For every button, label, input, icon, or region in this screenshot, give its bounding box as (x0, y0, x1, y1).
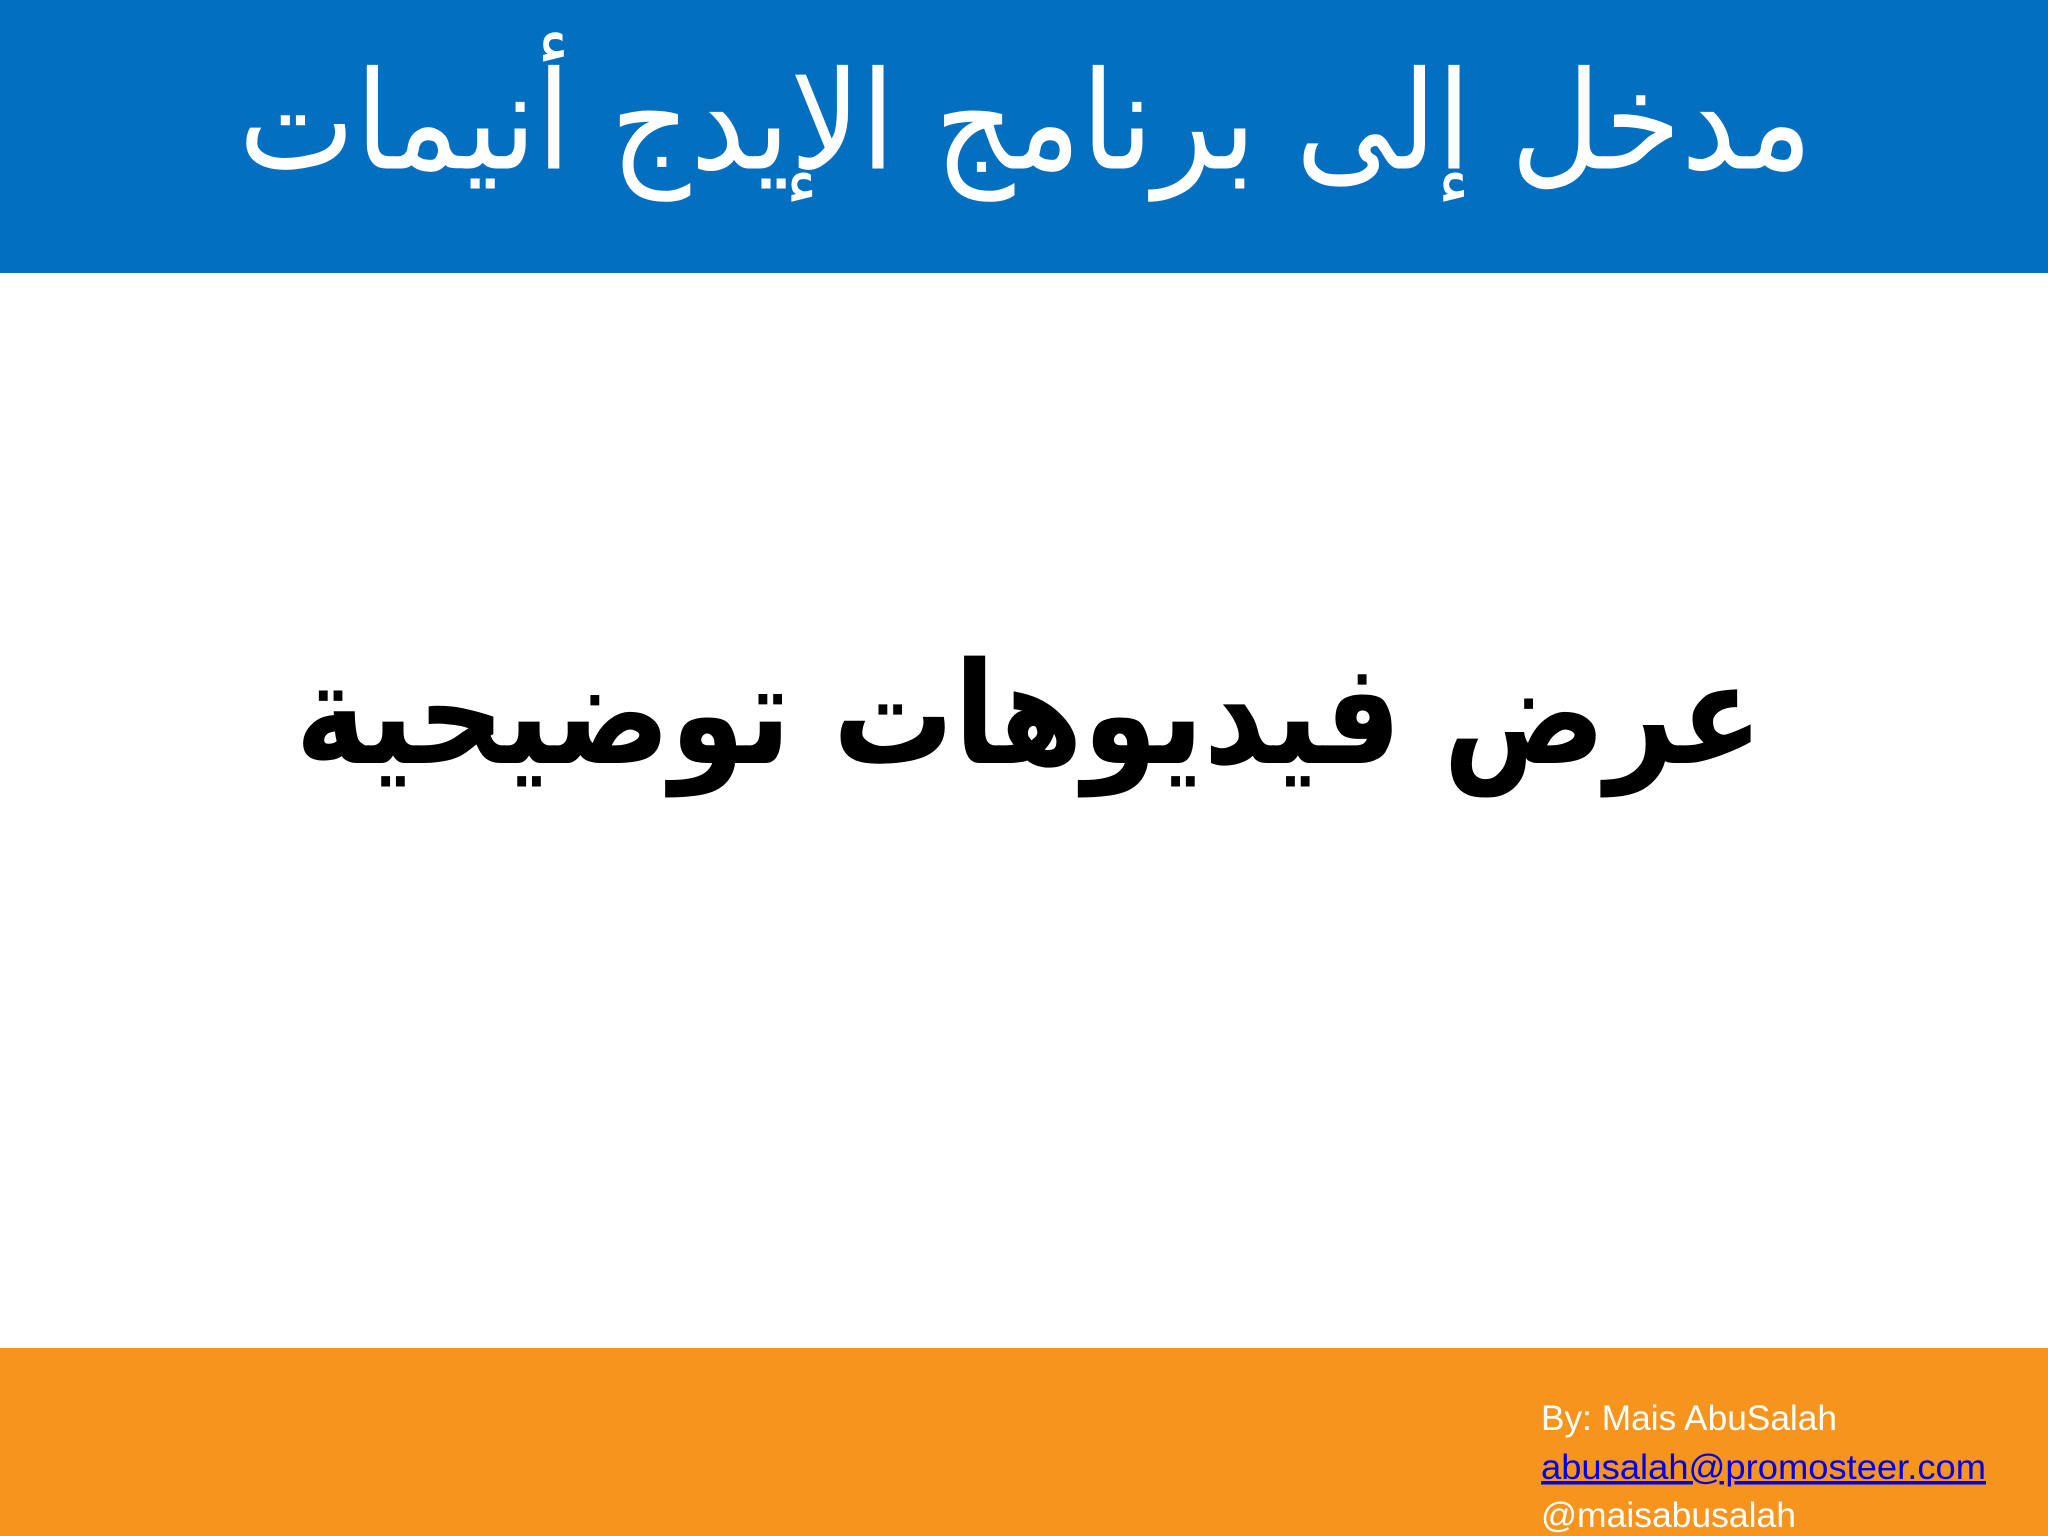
author name: By: Mais AbuSalah (1541, 1399, 1837, 1438)
social handle: @maisabusalah (1541, 1496, 1796, 1535)
author credits (1541, 1399, 1986, 1535)
main heading: عرض فيديوهات توضيحية (295, 632, 1763, 799)
footer band (0, 1348, 2048, 1536)
title: مدخل إلى برنامج الإيدج أنيمات (238, 32, 1813, 202)
header band (0, 0, 2048, 273)
email link: abusalah@promosteer.com (1541, 1448, 1986, 1487)
